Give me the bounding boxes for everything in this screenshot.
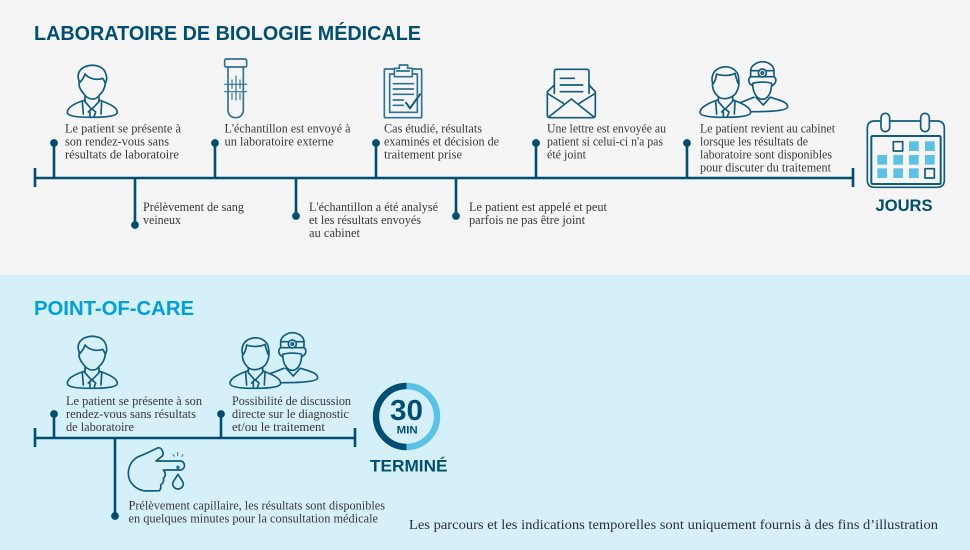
text: prélèvement capillaire: en quelques minutes pour la consultation médicale — [128, 512, 378, 526]
text: possibilité de discussion: directe sur le diagnostic — [232, 407, 349, 421]
text: lettre envoyée: Une lettre est envoyée au — [547, 122, 666, 136]
timer: 30 min: 30 — [390, 395, 423, 427]
icon: finger prick — [128, 448, 184, 491]
icon: patient — [67, 336, 117, 388]
text: patient se présente: résultats de laboratoire — [65, 148, 179, 162]
text: possibilité de discussion: Possibilité de discussion — [232, 394, 351, 408]
timeline: point-of-care — [35, 411, 355, 519]
text: patient revient: lorsque les résultats de — [700, 134, 808, 148]
text: possibilité de discussion: et/ou le traitement — [232, 420, 326, 434]
text: échantillon analysé: L'échantillon a été analysé — [309, 200, 438, 214]
text: patient se présente: son rendez-vous sans — [65, 134, 169, 148]
text: prélèvement capillaire — [128, 498, 385, 526]
text: patient appelé — [469, 200, 608, 227]
text: cas étudié: Cas étudié, résultats — [384, 122, 482, 136]
text: prélèvement de sang — [143, 200, 244, 227]
text: patient se présente — [65, 122, 181, 162]
icon: patient and doctor — [700, 62, 788, 117]
text: échantillon envoyé: L'échantillon est envoyé à — [224, 122, 351, 136]
text: lettre envoyée: patient si celui-ci n'a pas — [547, 134, 663, 148]
heading: point-of-care: POINT-OF-CARE — [34, 297, 194, 320]
text: lettre envoyée — [547, 122, 666, 162]
text: patient se présente: rendez-vous sans résultats — [66, 407, 196, 421]
icon: patient — [67, 65, 117, 117]
text: prélèvement capillaire: Prélèvement capillaire, les résultats sont disponibles — [128, 498, 385, 512]
timer: 30 min — [376, 386, 437, 447]
text: lettre envoyée: été joint — [547, 148, 587, 162]
panel: point-of-care — [0, 275, 970, 550]
footnote: Les parcours et les indications temporelles sont uniquement fournis à des fins d’illustration — [409, 517, 938, 532]
text: patient appelé: parfois ne pas être joint — [469, 213, 586, 227]
text: prélèvement de sang: veineux — [143, 213, 182, 227]
text: cas étudié — [384, 122, 499, 162]
text: échantillon analysé — [309, 200, 438, 240]
text: patient appelé: Le patient est appelé et peut — [469, 200, 608, 214]
text: échantillon envoyé — [224, 122, 351, 148]
label: jours: JOURS — [876, 196, 932, 215]
icon: patient and doctor — [230, 333, 318, 388]
text: cas étudié: traitement prise — [384, 148, 462, 162]
heading: laboratoire: LABORATOIRE DE BIOLOGIE MÉDICALE — [34, 22, 421, 45]
text: prélèvement de sang: Prélèvement de sang — [143, 200, 244, 214]
icon: test tube — [225, 59, 247, 118]
panel: laboratoire de biologie médicale — [0, 0, 970, 275]
label: terminé: TERMINÉ — [370, 456, 448, 476]
text: patient se présente: Le patient se présente à — [65, 122, 181, 136]
text: patient revient — [700, 122, 836, 174]
text: patient se présente — [66, 394, 202, 434]
text: patient revient: laboratoire sont disponibles — [700, 148, 832, 162]
timeline: laboratoire — [35, 140, 853, 228]
icon: clipboard — [384, 65, 422, 118]
icon: calendar — [867, 113, 944, 187]
text: échantillon analysé: et les résultats envoyés — [309, 213, 421, 227]
text: patient se présente: de laboratoire — [66, 420, 134, 434]
icon: envelope — [547, 69, 595, 118]
text: patient se présente: Le patient se présente à son — [66, 394, 202, 408]
timer: 30 min: MIN — [397, 424, 418, 436]
text: cas étudié: examinés et décision de — [384, 134, 499, 148]
text: patient revient: Le patient revient au cabinet — [700, 122, 836, 136]
text: possibilité de discussion — [232, 394, 351, 434]
text: patient revient: pour discuter du traitement — [700, 160, 832, 174]
text: échantillon analysé: au cabinet — [309, 226, 361, 240]
text: échantillon envoyé: un laboratoire externe — [224, 134, 334, 148]
